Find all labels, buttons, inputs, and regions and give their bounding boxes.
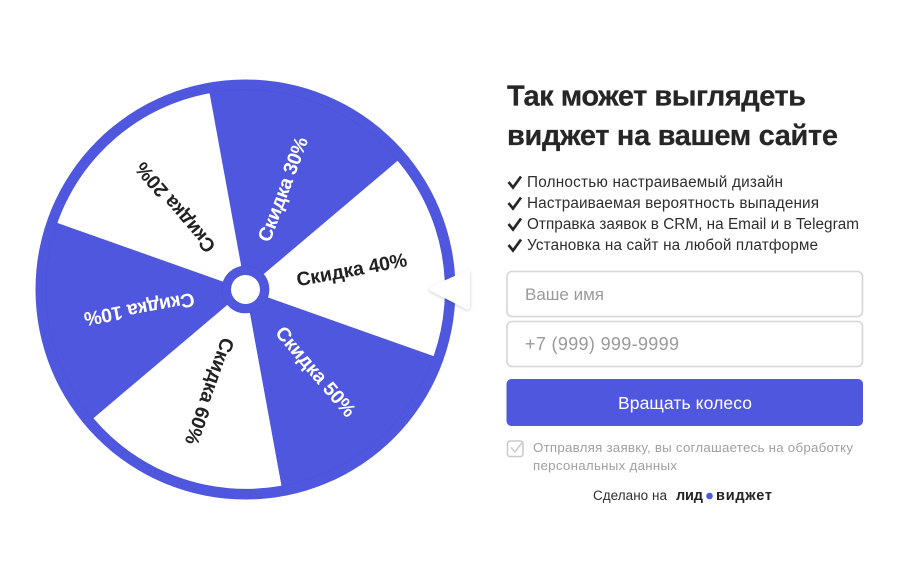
icon: checkbox [508, 441, 523, 456]
list item texts: Отправка заявок в CRM, на Email и в Telegram [527, 216, 859, 233]
list item texts [527, 174, 859, 254]
logo dot [706, 493, 713, 499]
title: Так может выглядеть [507, 80, 806, 112]
label: Скидка 60%: Скидка 60% [180, 335, 238, 448]
consent text: персональных данных [533, 458, 677, 473]
footer credit [593, 488, 772, 504]
label: Скидка 40%: Скидка 40% [295, 249, 409, 291]
input: name: Ваше имя [525, 285, 604, 304]
footer credit: Сделано на [593, 488, 667, 503]
feature list [508, 174, 859, 254]
consent [508, 440, 853, 473]
segment: Скидка 40% [246, 161, 445, 356]
consent text: Отправляя заявку, вы соглашаетесь на обработку [533, 440, 853, 455]
segment: Скидка 30% [210, 90, 398, 290]
consent text [533, 440, 853, 473]
icon: checks [508, 176, 521, 250]
input: phone: +7 (999) 999-9999 [525, 334, 679, 354]
label: Скидка 20%: Скидка 20% [131, 157, 220, 257]
wheel [36, 80, 456, 500]
input: name [507, 272, 862, 316]
footer credit: виджет [716, 488, 772, 504]
label: Скидка 50%: Скидка 50% [271, 322, 360, 422]
list item texts: Полностью настраиваемый дизайн [527, 174, 783, 191]
wheel rim [36, 80, 456, 500]
label: Скидка 10%: Скидка 10% [82, 288, 196, 330]
segment: Скидка 60% [93, 290, 281, 489]
title [507, 80, 838, 152]
list item texts: Настраиваемая вероятность выпадения [527, 195, 819, 212]
label: Скидка 30%: Скидка 30% [254, 134, 313, 245]
segment: Скидка 50% [246, 290, 434, 486]
footer credit: лид [676, 488, 703, 504]
segment: Скидка 20% [57, 93, 246, 290]
button: Вращать колесо [618, 393, 752, 413]
list item texts: Установка на сайт на любой платформе [527, 237, 818, 254]
pointer arrow [429, 271, 470, 309]
hub [222, 266, 269, 313]
input: phone [507, 322, 862, 366]
button [506, 379, 863, 426]
segment: Скидка 10% [46, 223, 246, 418]
title: виджет на вашем сайте [507, 120, 838, 152]
